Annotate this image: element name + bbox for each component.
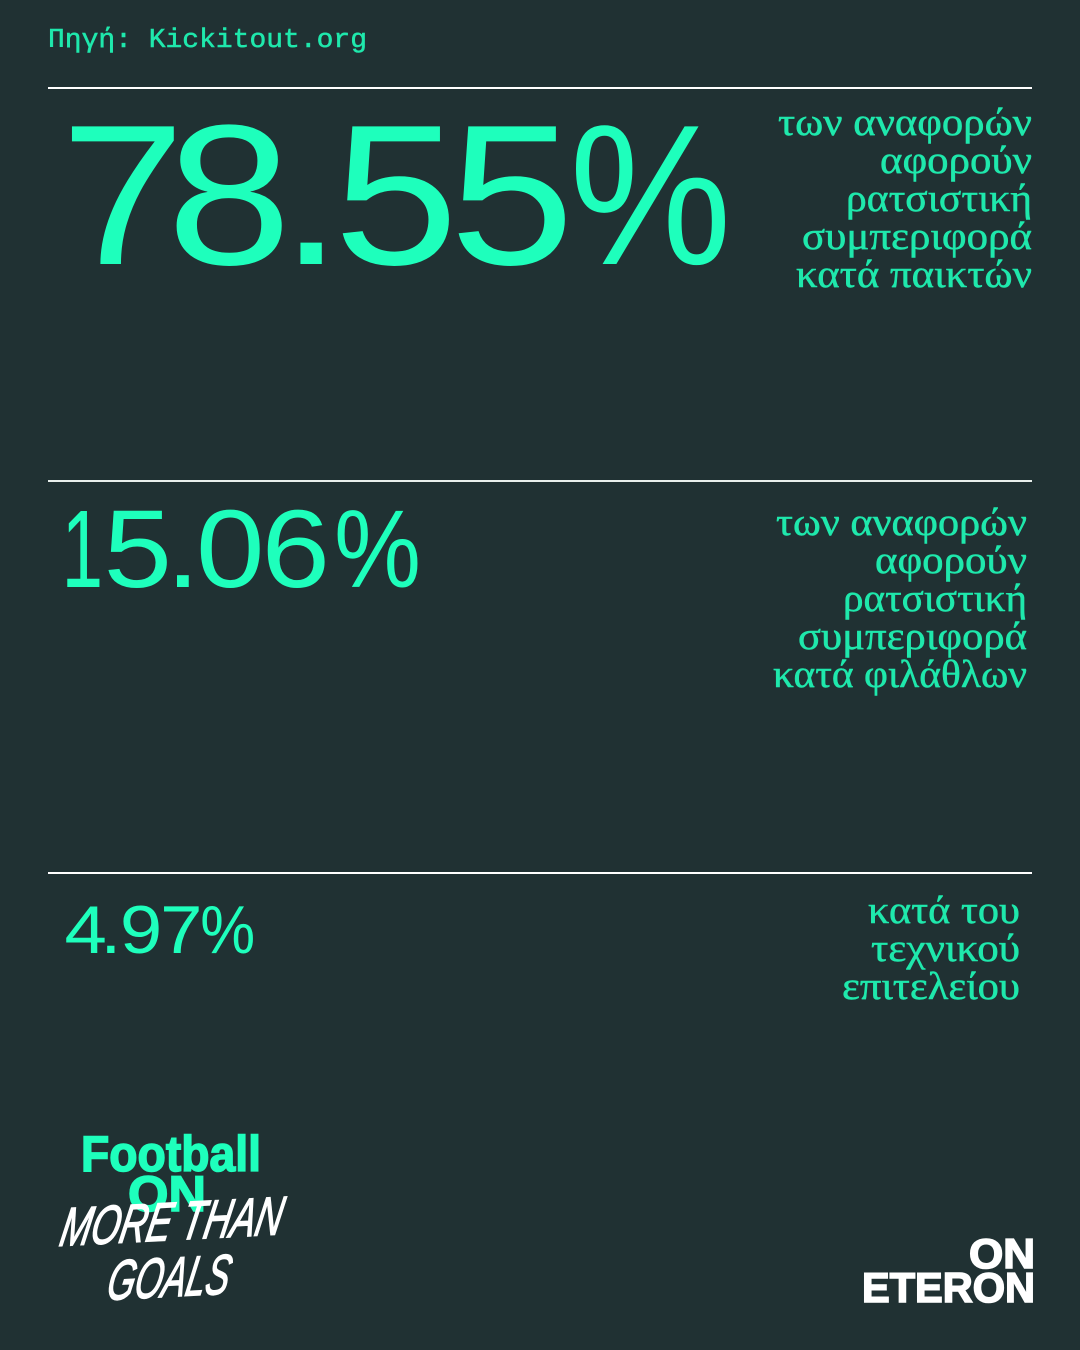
- logo: Football ON More Than Goals: MORE THAN: [56, 1185, 290, 1258]
- description: staff: επιτελείου: [842, 965, 1020, 1008]
- panel: players statistic: [60, 83, 1032, 306]
- panel: staff statistic: [65, 889, 1020, 1008]
- number: 15.06%: %: [334, 487, 421, 611]
- description: players: των αναφορών: [778, 101, 1032, 144]
- description: players: αφορούν: [880, 139, 1032, 182]
- number: 4.97%: %: [200, 893, 255, 968]
- description: players: ρατσιστική: [846, 177, 1032, 220]
- description: staff: τεχνικού: [871, 927, 1020, 970]
- description: fans: αφορούν: [875, 539, 1027, 582]
- logo: Football ON More Than Goals: GOALS: [102, 1244, 237, 1313]
- description: players: συμπεριφορά: [802, 215, 1032, 258]
- description: fans: κατά φιλάθλων: [773, 653, 1027, 696]
- logo: ON ETERON: ETERON: [862, 1264, 1035, 1311]
- description: players: κατά παικτών: [796, 253, 1032, 296]
- description: players: [778, 101, 1032, 296]
- logo: ON ETERON: [862, 1230, 1035, 1311]
- logo: Football ON More Than Goals: [56, 1126, 290, 1313]
- description: fans: των αναφορών: [776, 501, 1027, 544]
- number: 78.55%: %: [570, 83, 731, 306]
- description: fans: ρατσιστική: [843, 577, 1027, 620]
- description: staff: [842, 889, 1020, 1008]
- source line: Πηγή: Kickitout.org: [48, 26, 367, 56]
- description: fans: συμπεριφορά: [798, 615, 1027, 658]
- number: 15.06%: 5.06: [103, 487, 330, 611]
- description: fans: [773, 501, 1027, 696]
- number: 15.06%: 1: [62, 487, 103, 611]
- number: 4.97%: 4.97: [65, 893, 203, 968]
- logo: Football ON More Than Goals: Football: [81, 1126, 261, 1182]
- logo: ON ETERON: ON: [969, 1230, 1035, 1277]
- number: 78.55%: 78.55: [60, 83, 574, 306]
- panel: fans statistic: [62, 487, 1027, 696]
- logo: Football ON More Than Goals: ON: [128, 1166, 206, 1222]
- description: staff: κατά του: [868, 889, 1020, 932]
